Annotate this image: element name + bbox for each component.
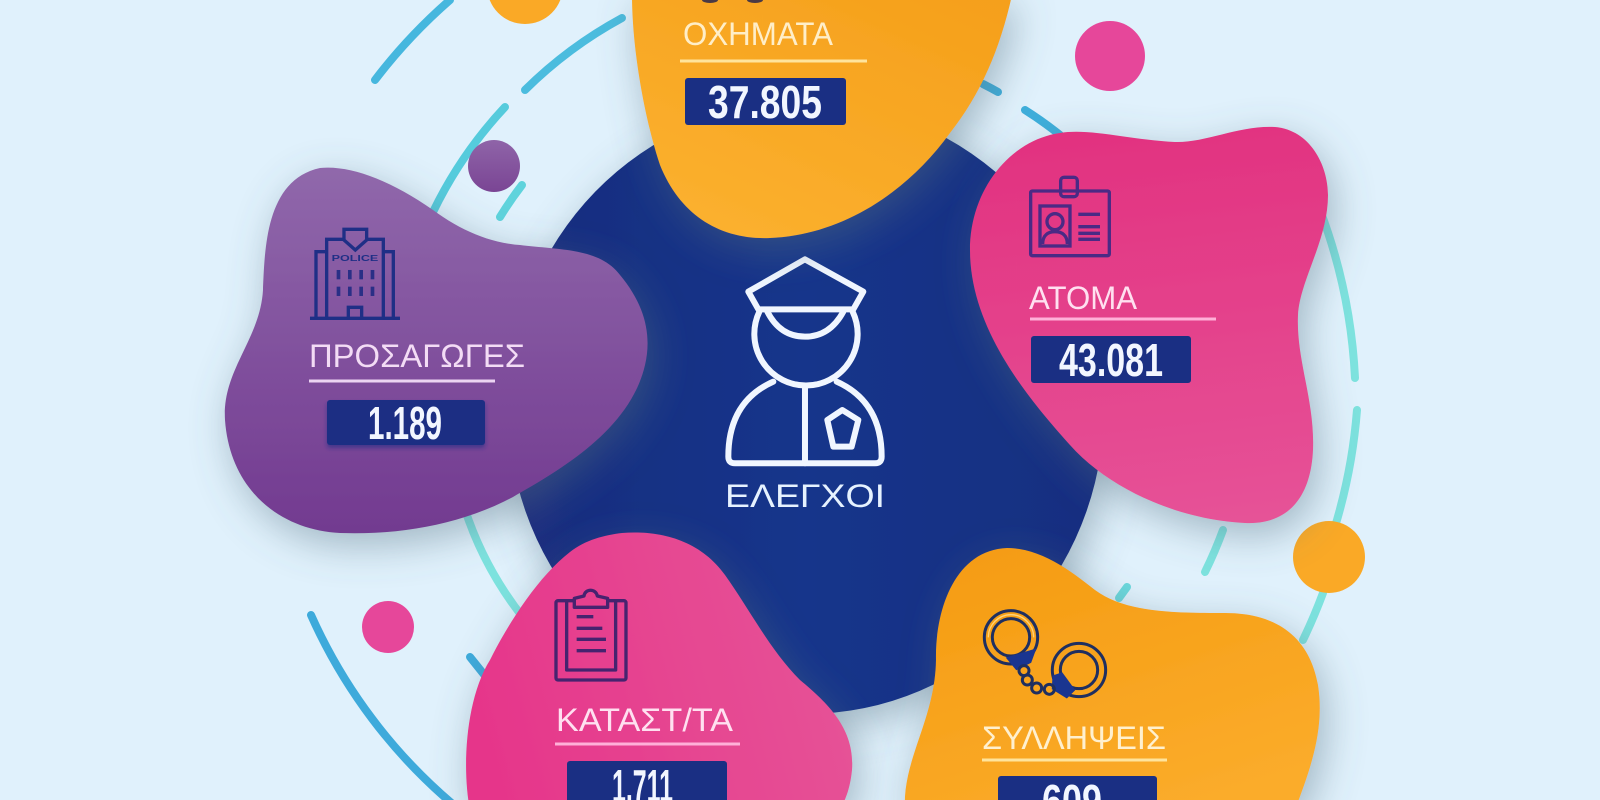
- icon: handcuffs: [984, 611, 1106, 697]
- value box: [998, 775, 1157, 800]
- icon: ID badge: [1031, 177, 1109, 256]
- value box: 1.189: [368, 397, 442, 449]
- label: ΟΧΗΜΑΤΑ: ΟΧΗΜΑΤΑ: [683, 16, 834, 52]
- label: ΚΑΤΑΣΤ/ΤΑ: ΚΑΤΑΣΤ/ΤΑ: [556, 702, 734, 738]
- panel: ΚΑΤΑΣΤ/ΤΑ: [466, 532, 852, 800]
- panel: ΠΡΟΣΑΓΩΓΕΣ: [225, 168, 648, 533]
- icon: clipboard: [556, 590, 626, 680]
- central navy circle: [508, 102, 1104, 714]
- label: ΣΥΛΛΗΨΕΙΣ: ΣΥΛΛΗΨΕΙΣ: [982, 720, 1166, 756]
- heading: ΕΛΕΓΧΟΙ: ΕΛΕΓΧΟΙ: [725, 478, 885, 514]
- decorative dot: pink left: [362, 601, 414, 653]
- panel: ΣΥΛΛΗΨΕΙΣ: [905, 548, 1320, 800]
- blob: purple left: [225, 168, 648, 533]
- divider: [1030, 318, 1216, 320]
- blob: orange top: [632, 0, 1012, 238]
- label: ΠΡΟΣΑΓΩΓΕΣ: ΠΡΟΣΑΓΩΓΕΣ: [309, 338, 525, 374]
- decorative dot: orange right: [1293, 521, 1365, 593]
- panel: ΑΤΟΜΑ: [970, 127, 1328, 523]
- icon: police officer: [728, 259, 882, 463]
- panel: ΕΛΕΓΧΟΙ centre: [725, 259, 885, 514]
- divider: [555, 742, 740, 746]
- divider: [309, 380, 495, 382]
- blob: pink right: [970, 127, 1328, 523]
- value box: 37.805: [708, 76, 822, 128]
- icon: vehicle wheels: [702, 0, 763, 3]
- label: ΑΤΟΜΑ: ΑΤΟΜΑ: [1029, 280, 1138, 316]
- dashed orbit rings: [311, 0, 1357, 800]
- icon: police building: [310, 229, 400, 318]
- blob: orange bottom right: [905, 548, 1320, 800]
- value box: 43.081: [1059, 334, 1163, 386]
- icon: police building: POLICE: [332, 254, 379, 263]
- panel: ΟΧΗΜΑΤΑ: [632, 0, 1012, 238]
- divider: [680, 60, 867, 62]
- divider: [982, 758, 1167, 762]
- decorative dot: pink top right: [1075, 21, 1145, 91]
- decorative dot: orange top left: [487, 0, 563, 24]
- blob: pink bottom left: [466, 532, 852, 800]
- decorative dot: purple: [468, 140, 520, 192]
